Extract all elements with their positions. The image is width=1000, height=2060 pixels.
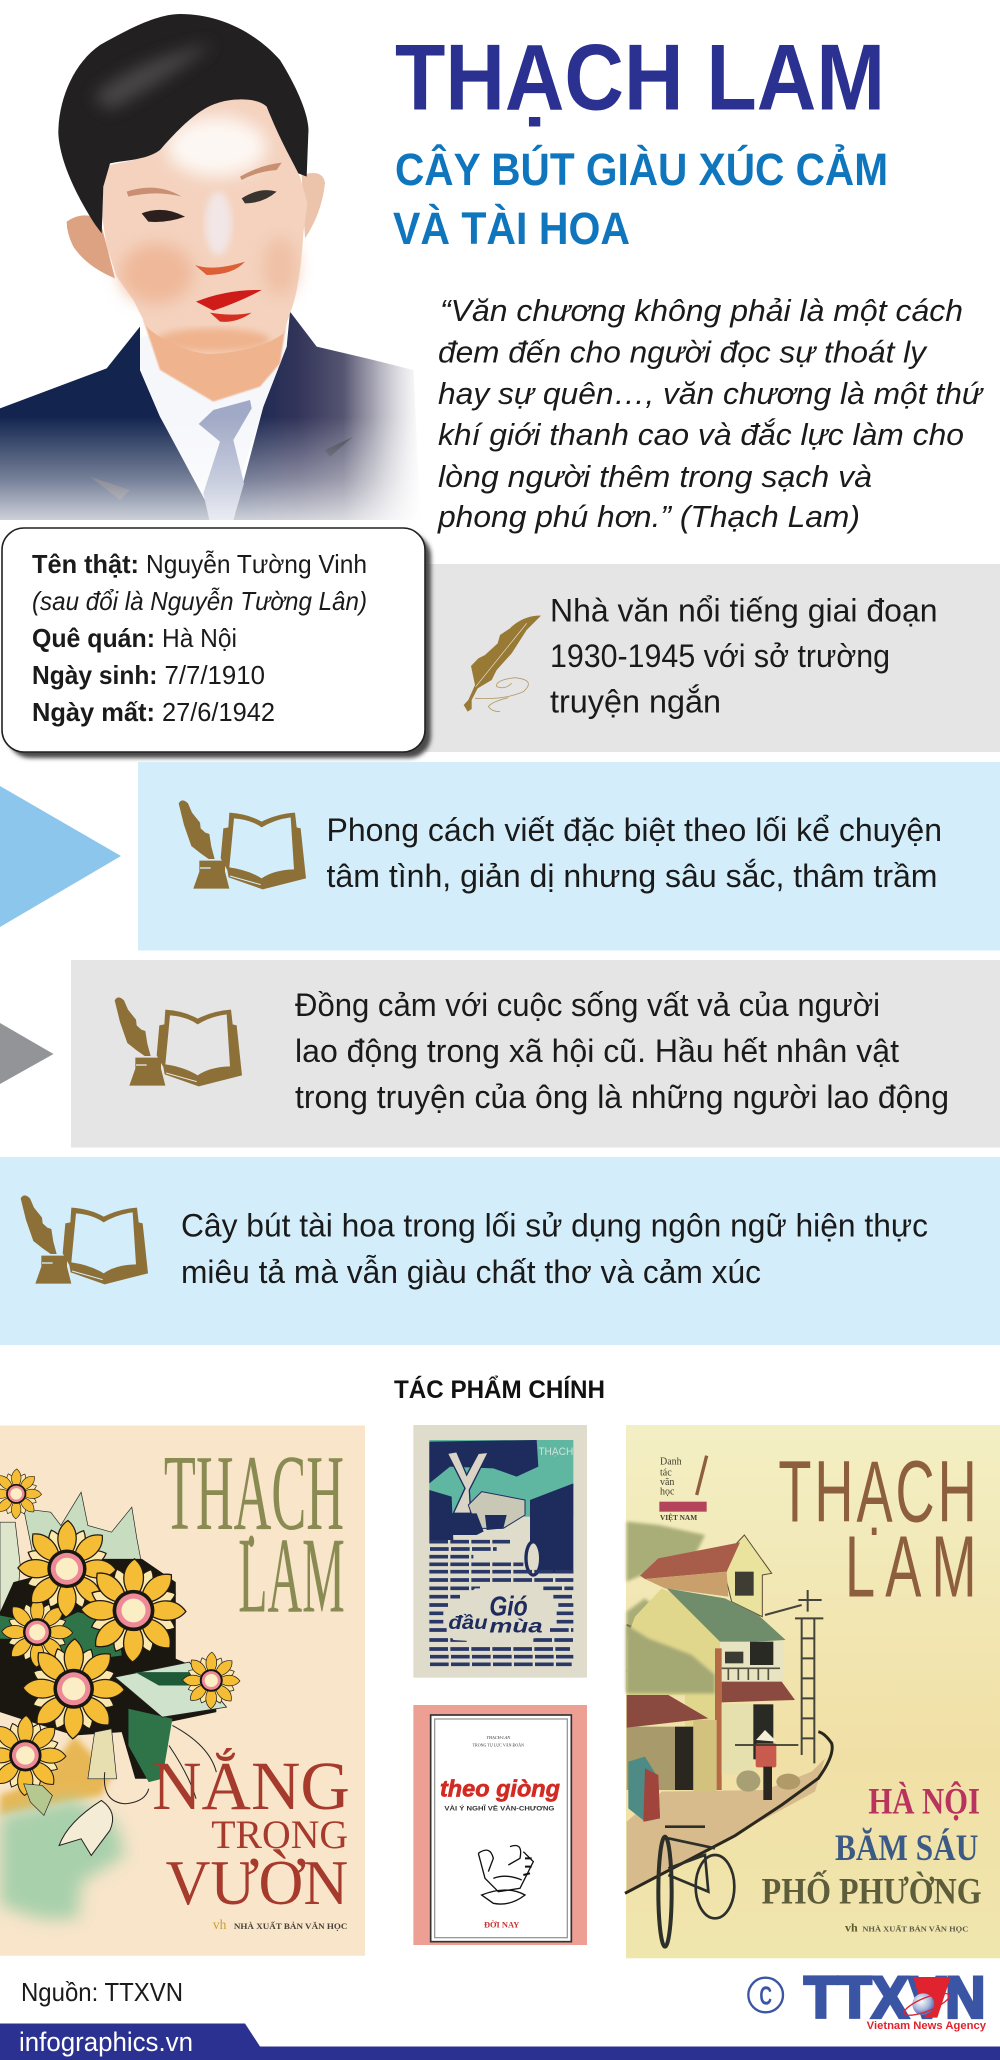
logo: copyright mark bbox=[748, 1978, 783, 2012]
cover: pale side leaf bbox=[88, 1729, 117, 1779]
cover: vendor bbox=[756, 1730, 777, 1742]
cover author bbox=[473, 1735, 524, 1747]
info card: Hà Nội bbox=[162, 623, 237, 653]
cover: green wash bbox=[0, 1799, 125, 1919]
portrait: right ear bbox=[302, 173, 325, 238]
info card: Ngày mất: bbox=[32, 697, 155, 727]
panel text: truyện ngắn bbox=[550, 684, 721, 720]
cover: light bottle shape bbox=[443, 1588, 550, 1643]
cover: flowers bbox=[0, 1469, 42, 1519]
info card: 27/6/1942 bbox=[162, 697, 275, 727]
cover: stems bbox=[104, 1725, 216, 1804]
quote: khí giới thanh cao và đắc lực làm cho bbox=[438, 417, 964, 452]
quote: lòng người thêm trong sạch và bbox=[438, 459, 872, 494]
cover author: TRONG TỰ LỰC VĂN ĐOÀN bbox=[473, 1742, 524, 1747]
portrait: hair shine bbox=[93, 43, 213, 110]
cover book name: TRONG bbox=[211, 1812, 348, 1857]
panel text: Cây bút tài hoa trong lối sử dụng ngôn ngữ hiện thực bbox=[181, 1208, 928, 1244]
icon: inkwell and book bbox=[115, 997, 242, 1086]
cover: brick band bbox=[645, 1572, 728, 1597]
cover author: THẠCH-LAN bbox=[487, 1735, 511, 1740]
info card: Ngày sinh: bbox=[32, 660, 158, 690]
cover: people left bbox=[628, 1757, 660, 1822]
cover: left leaves bbox=[0, 1522, 20, 1625]
portrait: right cheek tone bbox=[263, 237, 297, 297]
cover: author: LAM bbox=[845, 1519, 977, 1616]
footer band bbox=[0, 2024, 1000, 2060]
icon: quill bbox=[464, 616, 541, 712]
cover book name: đầu bbox=[448, 1613, 488, 1634]
logo: agency name: Vietnam News Agency bbox=[867, 2020, 987, 2032]
cover: hut dark base bbox=[450, 1513, 507, 1535]
quote: đem đến cho người đọc sự thoát ly bbox=[438, 334, 929, 370]
portrait: left ear bbox=[67, 215, 115, 278]
cover book name: mùa bbox=[489, 1616, 543, 1637]
cover: gable bbox=[725, 1535, 772, 1617]
quote bbox=[437, 293, 984, 534]
icon: inkwell and book bbox=[21, 1195, 148, 1284]
portrait: upper lip bbox=[196, 290, 262, 311]
logo: wordmark: TTXVN bbox=[804, 1965, 985, 2030]
panel text: miêu tả mà vẫn giàu chất thơ và cảm xúc bbox=[181, 1254, 761, 1290]
panel text: 1930-1945 với sở trường bbox=[550, 638, 890, 674]
cover: small leaves bbox=[24, 1784, 52, 1815]
arrow: gray bbox=[0, 1023, 54, 1084]
cover: green leaves bbox=[0, 1612, 172, 1782]
cover subtitle: VÀI Ý NGHĨ VỀ VĂN-CHƯƠNG bbox=[444, 1803, 554, 1813]
logo: TTXVN bbox=[748, 1965, 987, 2032]
portrait: shirt bbox=[140, 327, 287, 503]
source: Nguồn: TTXVN bbox=[21, 1977, 183, 2007]
cover: author bbox=[778, 1444, 977, 1616]
cover: framed page bbox=[431, 1715, 571, 1942]
portrait: tie bbox=[199, 400, 252, 520]
logo: copyright mark: C bbox=[759, 1980, 772, 2010]
panel text: lao động trong xã hội cũ. Hầu hết nhân vật bbox=[295, 1033, 899, 1069]
cover: tree trunk bbox=[447, 1452, 488, 1513]
book cover: Hà Nội băm sáu phố phường bbox=[625, 1425, 1000, 1958]
cover: dark trees bbox=[429, 1440, 573, 1573]
cover publisher: NHÀ XUẤT BẢN VĂN HỌC bbox=[862, 1924, 968, 1934]
panel: writing style bbox=[138, 762, 1000, 950]
cover: series mark: học bbox=[660, 1486, 675, 1497]
panel text: Đồng cảm với cuộc sống vất vả của người bbox=[295, 987, 880, 1023]
panel text bbox=[550, 592, 938, 720]
icon: inkwell and book bbox=[179, 800, 306, 889]
book cover: Nắng trong vườn: LAM bbox=[238, 1515, 345, 1635]
portrait: brows bbox=[127, 163, 282, 197]
cover book name: Gió bbox=[489, 1591, 528, 1622]
logo: red V bbox=[913, 1977, 951, 2018]
cover: series mark: văn bbox=[660, 1477, 674, 1488]
portrait: cheek tone bbox=[120, 243, 193, 303]
portrait: left eye bbox=[142, 210, 185, 222]
panel: empathy bbox=[71, 960, 1000, 1148]
cover: bird drawing bbox=[478, 1846, 533, 1904]
portrait: nose bbox=[195, 262, 245, 275]
portrait: hair bbox=[58, 14, 308, 233]
info card bbox=[2, 528, 431, 758]
cover author: THẠCH bbox=[538, 1446, 573, 1458]
portrait: forehead highlight bbox=[167, 117, 267, 177]
portrait: chin tone bbox=[157, 328, 270, 352]
cover: branches bbox=[627, 1625, 662, 1692]
portrait: right eye bbox=[242, 190, 277, 203]
cover: bicycle bbox=[658, 1827, 734, 1947]
logo: globe bbox=[902, 1989, 951, 2020]
portrait of Thạch Lam bbox=[0, 14, 423, 522]
panel text bbox=[295, 987, 949, 1115]
portrait: lower lip bbox=[210, 313, 252, 322]
cover: series mark: tác bbox=[660, 1468, 672, 1479]
panel: famous writer bbox=[425, 564, 1000, 752]
book cover: Theo giòng bbox=[413, 1705, 587, 1945]
cover: teal sky bbox=[429, 1440, 573, 1517]
cover book name: NẮNG bbox=[152, 1747, 350, 1824]
quote: phong phú hơn.” (Thạch Lam) bbox=[437, 499, 860, 534]
cover: left shop bbox=[627, 1727, 675, 1790]
cover: series mark bbox=[659, 1456, 707, 1522]
arrow: blue bbox=[0, 786, 121, 927]
panel text: trong truyện của ông là những người lao động bbox=[295, 1079, 949, 1115]
cover: bud bbox=[59, 1800, 113, 1855]
cover publisher bbox=[213, 1917, 347, 1932]
cover book name: BĂM SÁU bbox=[835, 1827, 978, 1868]
cover: road bbox=[450, 1525, 530, 1572]
cover book name bbox=[448, 1591, 543, 1637]
cover title bbox=[164, 1433, 345, 1635]
subtitle bbox=[393, 144, 888, 254]
cover publisher: vh bbox=[845, 1921, 858, 1935]
heading: main works: TÁC PHẨM CHÍNH bbox=[394, 1375, 605, 1404]
cover: pale big leaf bbox=[115, 1662, 226, 1717]
portrait: suit left bbox=[0, 327, 220, 520]
subtitle: VÀ TÀI HOA bbox=[393, 203, 630, 254]
footer text: infographics.vn bbox=[19, 2027, 193, 2057]
info card: Quê quán: bbox=[32, 623, 155, 653]
panel text: Phong cách viết đặc biệt theo lối kể chuyện bbox=[326, 812, 942, 848]
portrait: nose bridge bbox=[205, 192, 232, 255]
cover book name bbox=[152, 1747, 350, 1918]
cover: author: THẠCH bbox=[778, 1444, 977, 1541]
panel: talent bbox=[0, 1157, 1000, 1345]
cover: series mark: VIỆT NAM bbox=[660, 1513, 697, 1522]
panel text: Nhà văn nổi tiếng giai đoạn bbox=[550, 592, 938, 628]
cover: amber wash bbox=[0, 1735, 112, 1815]
cover: cart wheel bbox=[526, 1542, 541, 1575]
cover publisher: NHÀ XUẤT BẢN VĂN HỌC bbox=[234, 1921, 347, 1931]
cover: road ground bbox=[627, 1758, 825, 1892]
portrait: suit right bbox=[233, 312, 421, 520]
cover: series mark: Danh bbox=[660, 1456, 682, 1467]
portrait: face bbox=[102, 99, 307, 354]
cover: pale leaves bbox=[24, 1492, 142, 1565]
cover: lower house wall bbox=[627, 1588, 720, 1790]
cover: pole bbox=[765, 1590, 823, 1763]
cover: lines bbox=[429, 1542, 573, 1664]
cover: foliage over wall bbox=[627, 1625, 715, 1693]
cover: dark foliage bbox=[0, 1559, 216, 1779]
cover: road curve bbox=[625, 1732, 832, 1893]
portrait: lapel notch bbox=[90, 437, 353, 500]
cover: ground floor bbox=[722, 1704, 753, 1774]
book cover: Nắng trong vườn bbox=[0, 1426, 365, 1956]
cover: pillar bbox=[715, 1648, 722, 1790]
info card: (sau đổi là Nguyễn Tường Lân) bbox=[32, 586, 367, 616]
book cover: Nắng trong vườn: THẠCH bbox=[164, 1433, 344, 1553]
subtitle: CÂY BÚT GIÀU XÚC CẢM bbox=[395, 144, 888, 195]
portrait: neck bbox=[143, 320, 287, 402]
cover book name: theo giòng bbox=[440, 1776, 560, 1802]
cover: red roof bbox=[640, 1542, 740, 1579]
cover publisher bbox=[845, 1921, 968, 1935]
panel text bbox=[181, 1208, 928, 1290]
cover: foliage bbox=[627, 1522, 715, 1692]
cover publisher: ĐỜI NAY bbox=[484, 1919, 520, 1929]
panel text: tâm tình, giản dị nhưng sâu sắc, thâm trầm bbox=[326, 858, 938, 894]
quote: hay sự quên…, văn chương là một thứ bbox=[438, 376, 984, 411]
cover: hut bbox=[468, 1492, 525, 1528]
main title: THẠCH LAM bbox=[395, 24, 885, 130]
cover: upper floor bbox=[720, 1642, 783, 1682]
cover book name: VƯỜN bbox=[166, 1847, 348, 1918]
cover publisher: vh bbox=[213, 1917, 227, 1932]
info card: 7/7/1910 bbox=[164, 660, 265, 690]
cover book name: HÀ NỘI bbox=[868, 1780, 980, 1821]
cover: green roof bbox=[667, 1588, 786, 1643]
portrait: bottom fade bbox=[0, 417, 423, 522]
info card: Nguyễn Tường Vinh bbox=[146, 549, 367, 579]
cover book name bbox=[762, 1780, 982, 1911]
info card: Tên thật: bbox=[32, 549, 139, 579]
panel text bbox=[326, 812, 942, 894]
portrait: right fade bbox=[343, 347, 423, 522]
book cover: Gió đầu mùa bbox=[413, 1425, 587, 1678]
quote: “Văn chương không phải là một cách bbox=[440, 293, 963, 328]
cover: awning bbox=[722, 1682, 795, 1702]
